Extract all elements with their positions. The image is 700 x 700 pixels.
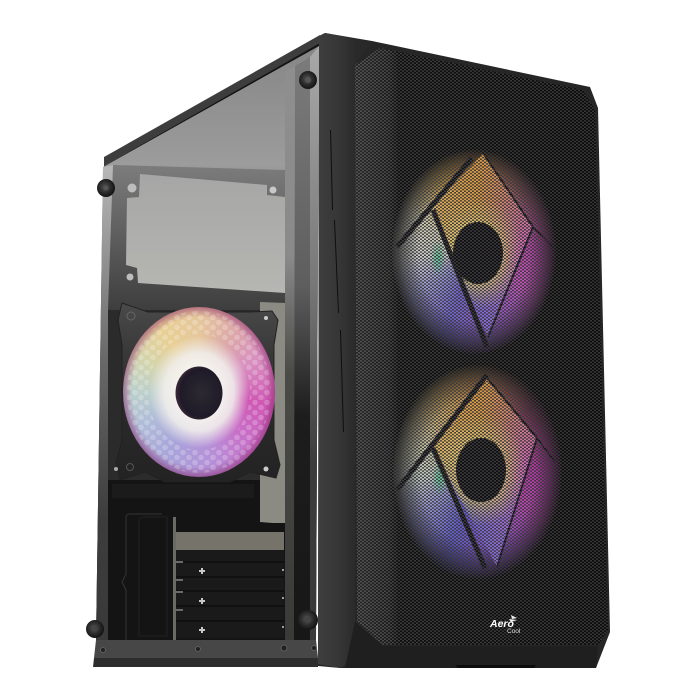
- expansion bar: [173, 532, 284, 550]
- front bezel: [318, 33, 610, 668]
- logo: [489, 615, 521, 635]
- front mesh: [355, 48, 608, 645]
- side fan backing: [108, 310, 260, 480]
- screw bottom left: [86, 620, 104, 638]
- drive plate: [126, 174, 285, 293]
- top fan blades: [397, 153, 553, 347]
- bottom rail: [93, 640, 318, 667]
- bottom fan hub: [456, 438, 506, 502]
- glass frame strips: [285, 46, 319, 640]
- side RGB fan: [123, 307, 275, 477]
- bottom front fan: [393, 365, 562, 579]
- right cut-out plate: [260, 302, 285, 523]
- side bracket: [122, 514, 167, 640]
- bottom fan glow: [432, 460, 448, 496]
- lower chassis: [108, 480, 285, 640]
- bezel slits: [330, 130, 344, 432]
- logo: Aero: [489, 618, 515, 630]
- screw top right: [299, 71, 317, 89]
- screw bottom right: [298, 610, 318, 630]
- side fan frame: [114, 303, 280, 482]
- top fan glow: [430, 240, 446, 276]
- top fan hub: [453, 222, 503, 284]
- bottom fan bright blade: [434, 379, 536, 565]
- expansion slots: [173, 517, 284, 640]
- interior recess around drive plate: [108, 165, 285, 310]
- mesh backing: [355, 48, 608, 645]
- top rail: [104, 35, 320, 166]
- bottom fan blades: [397, 375, 555, 568]
- glass side panel: [96, 46, 319, 640]
- screw left: [97, 179, 115, 197]
- top front fan: [392, 150, 556, 354]
- logo: Cool: [507, 628, 521, 635]
- left glass edge: [96, 165, 113, 640]
- top fan bright blade: [433, 153, 532, 336]
